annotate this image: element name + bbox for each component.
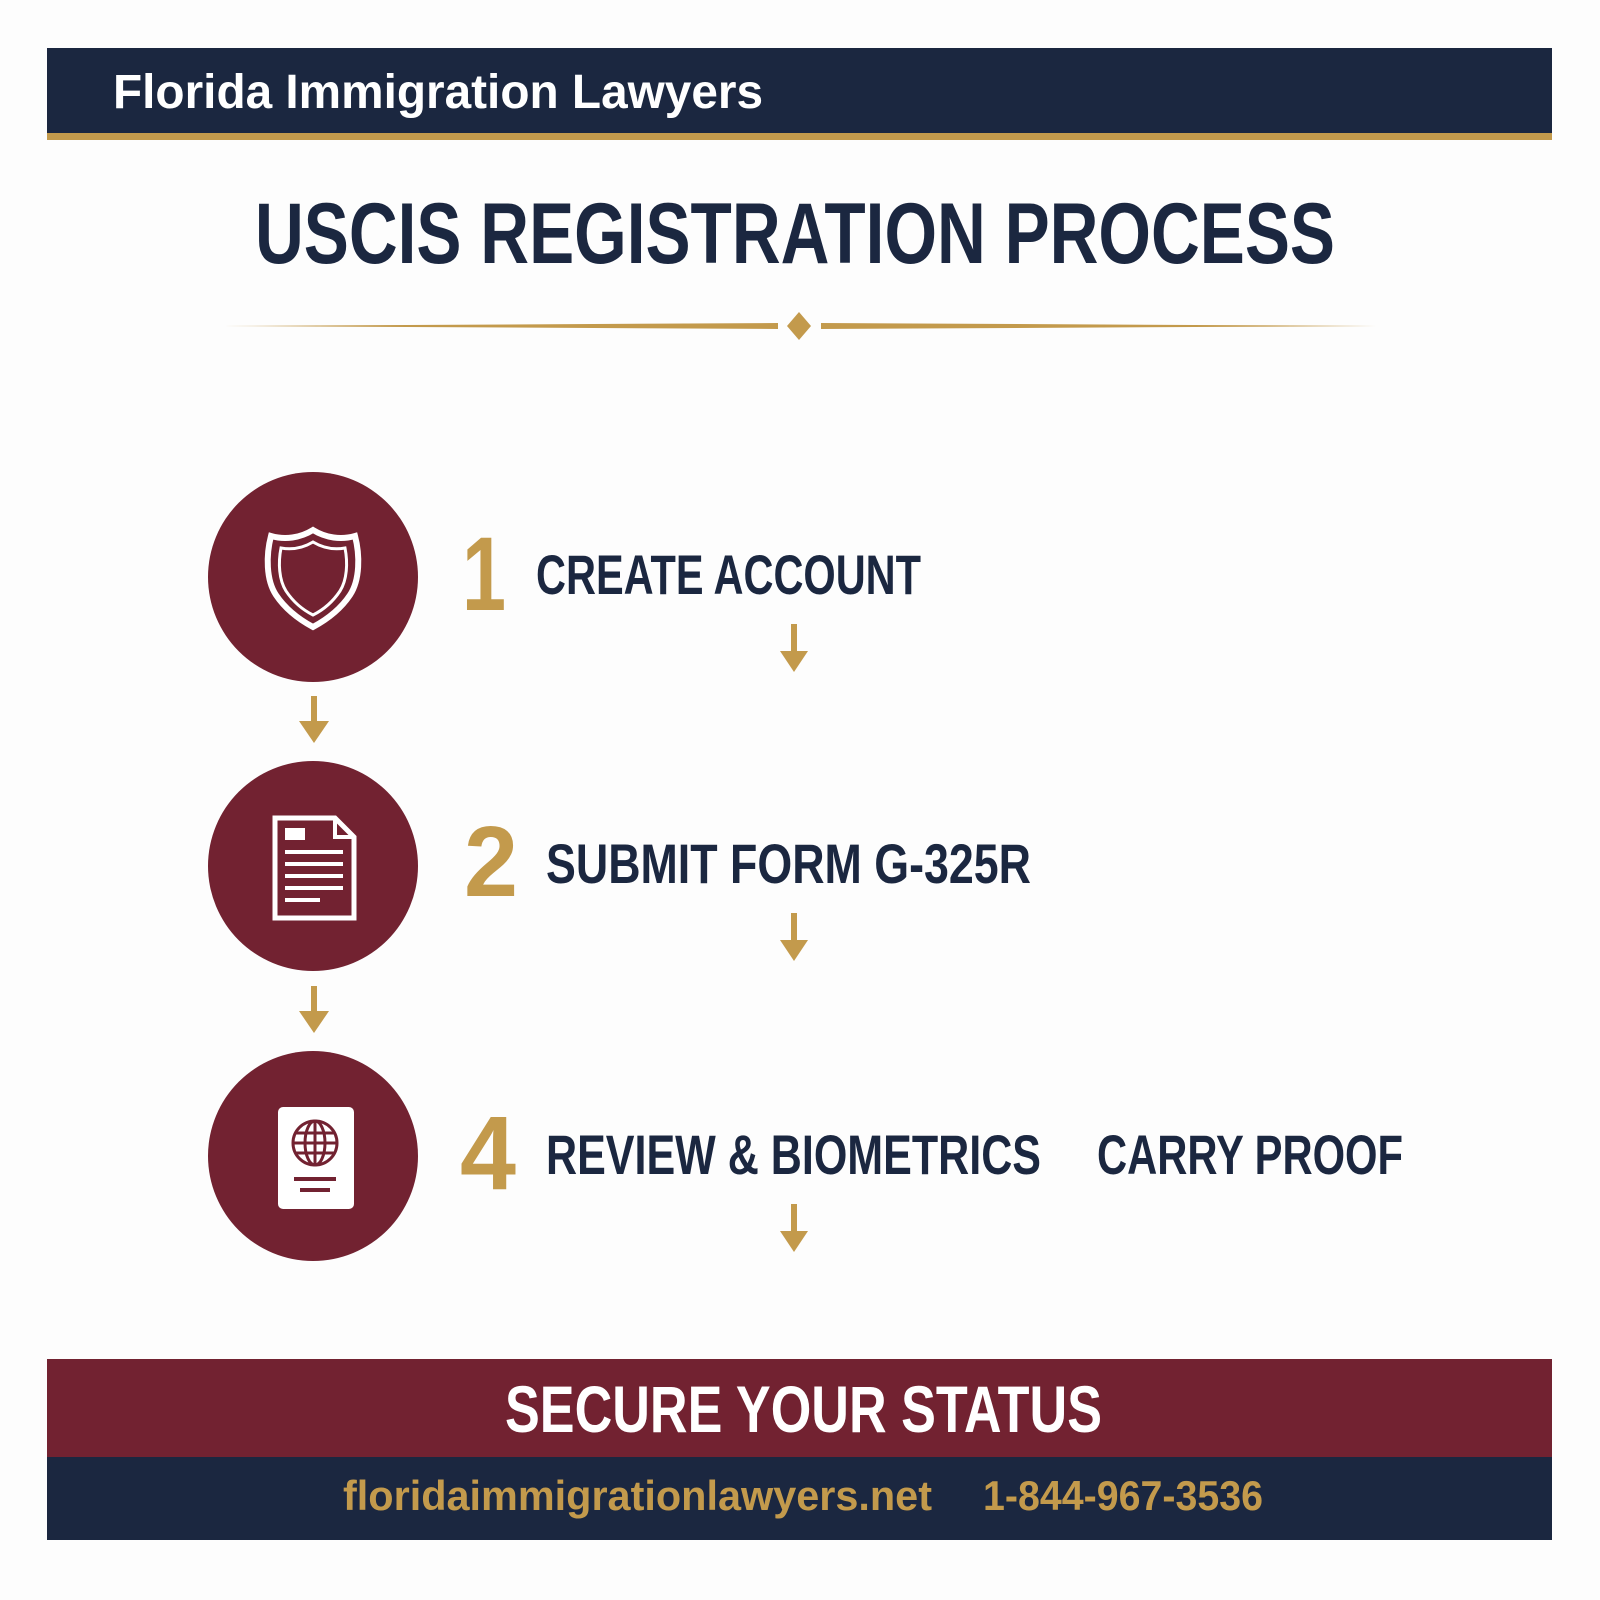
icon: shield circle [208, 472, 418, 682]
header text: Florida Immigration Lawyers [113, 66, 763, 119]
icon: passport circle [208, 1051, 418, 1261]
phone: 1-844-967-3536 [983, 1472, 1263, 1519]
step 4 [208, 1051, 1403, 1261]
arrow [780, 624, 808, 672]
title divider [223, 312, 1376, 340]
arrow: step2 to step4 [299, 986, 329, 1033]
contact bar [47, 1457, 1552, 1540]
arrow: step1 to step2 [299, 696, 329, 743]
arrow [780, 1204, 808, 1252]
header bar [47, 48, 1552, 140]
label: create account: CREATE ACCOUNT [536, 543, 921, 606]
number 2: 2 [464, 806, 518, 918]
footer banner [47, 1359, 1552, 1457]
icon: document circle [208, 761, 418, 971]
label: carry proof: CARRY PROOF [1097, 1123, 1403, 1186]
footer slogan: SECURE YOUR STATUS [505, 1372, 1102, 1446]
label: review & biometrics: REVIEW & BIOMETRICS [546, 1123, 1041, 1186]
title: USCIS REGISTRATION PROCESS [255, 186, 1335, 282]
number 1: 1 [462, 516, 506, 633]
label: submit form: SUBMIT FORM G-325R [546, 832, 1031, 895]
website: floridaimmigrationlawyers.net [343, 1472, 932, 1519]
step 2 [208, 761, 1031, 971]
arrow [780, 913, 808, 961]
step 1 [208, 472, 921, 682]
number 4: 4 [460, 1095, 516, 1212]
